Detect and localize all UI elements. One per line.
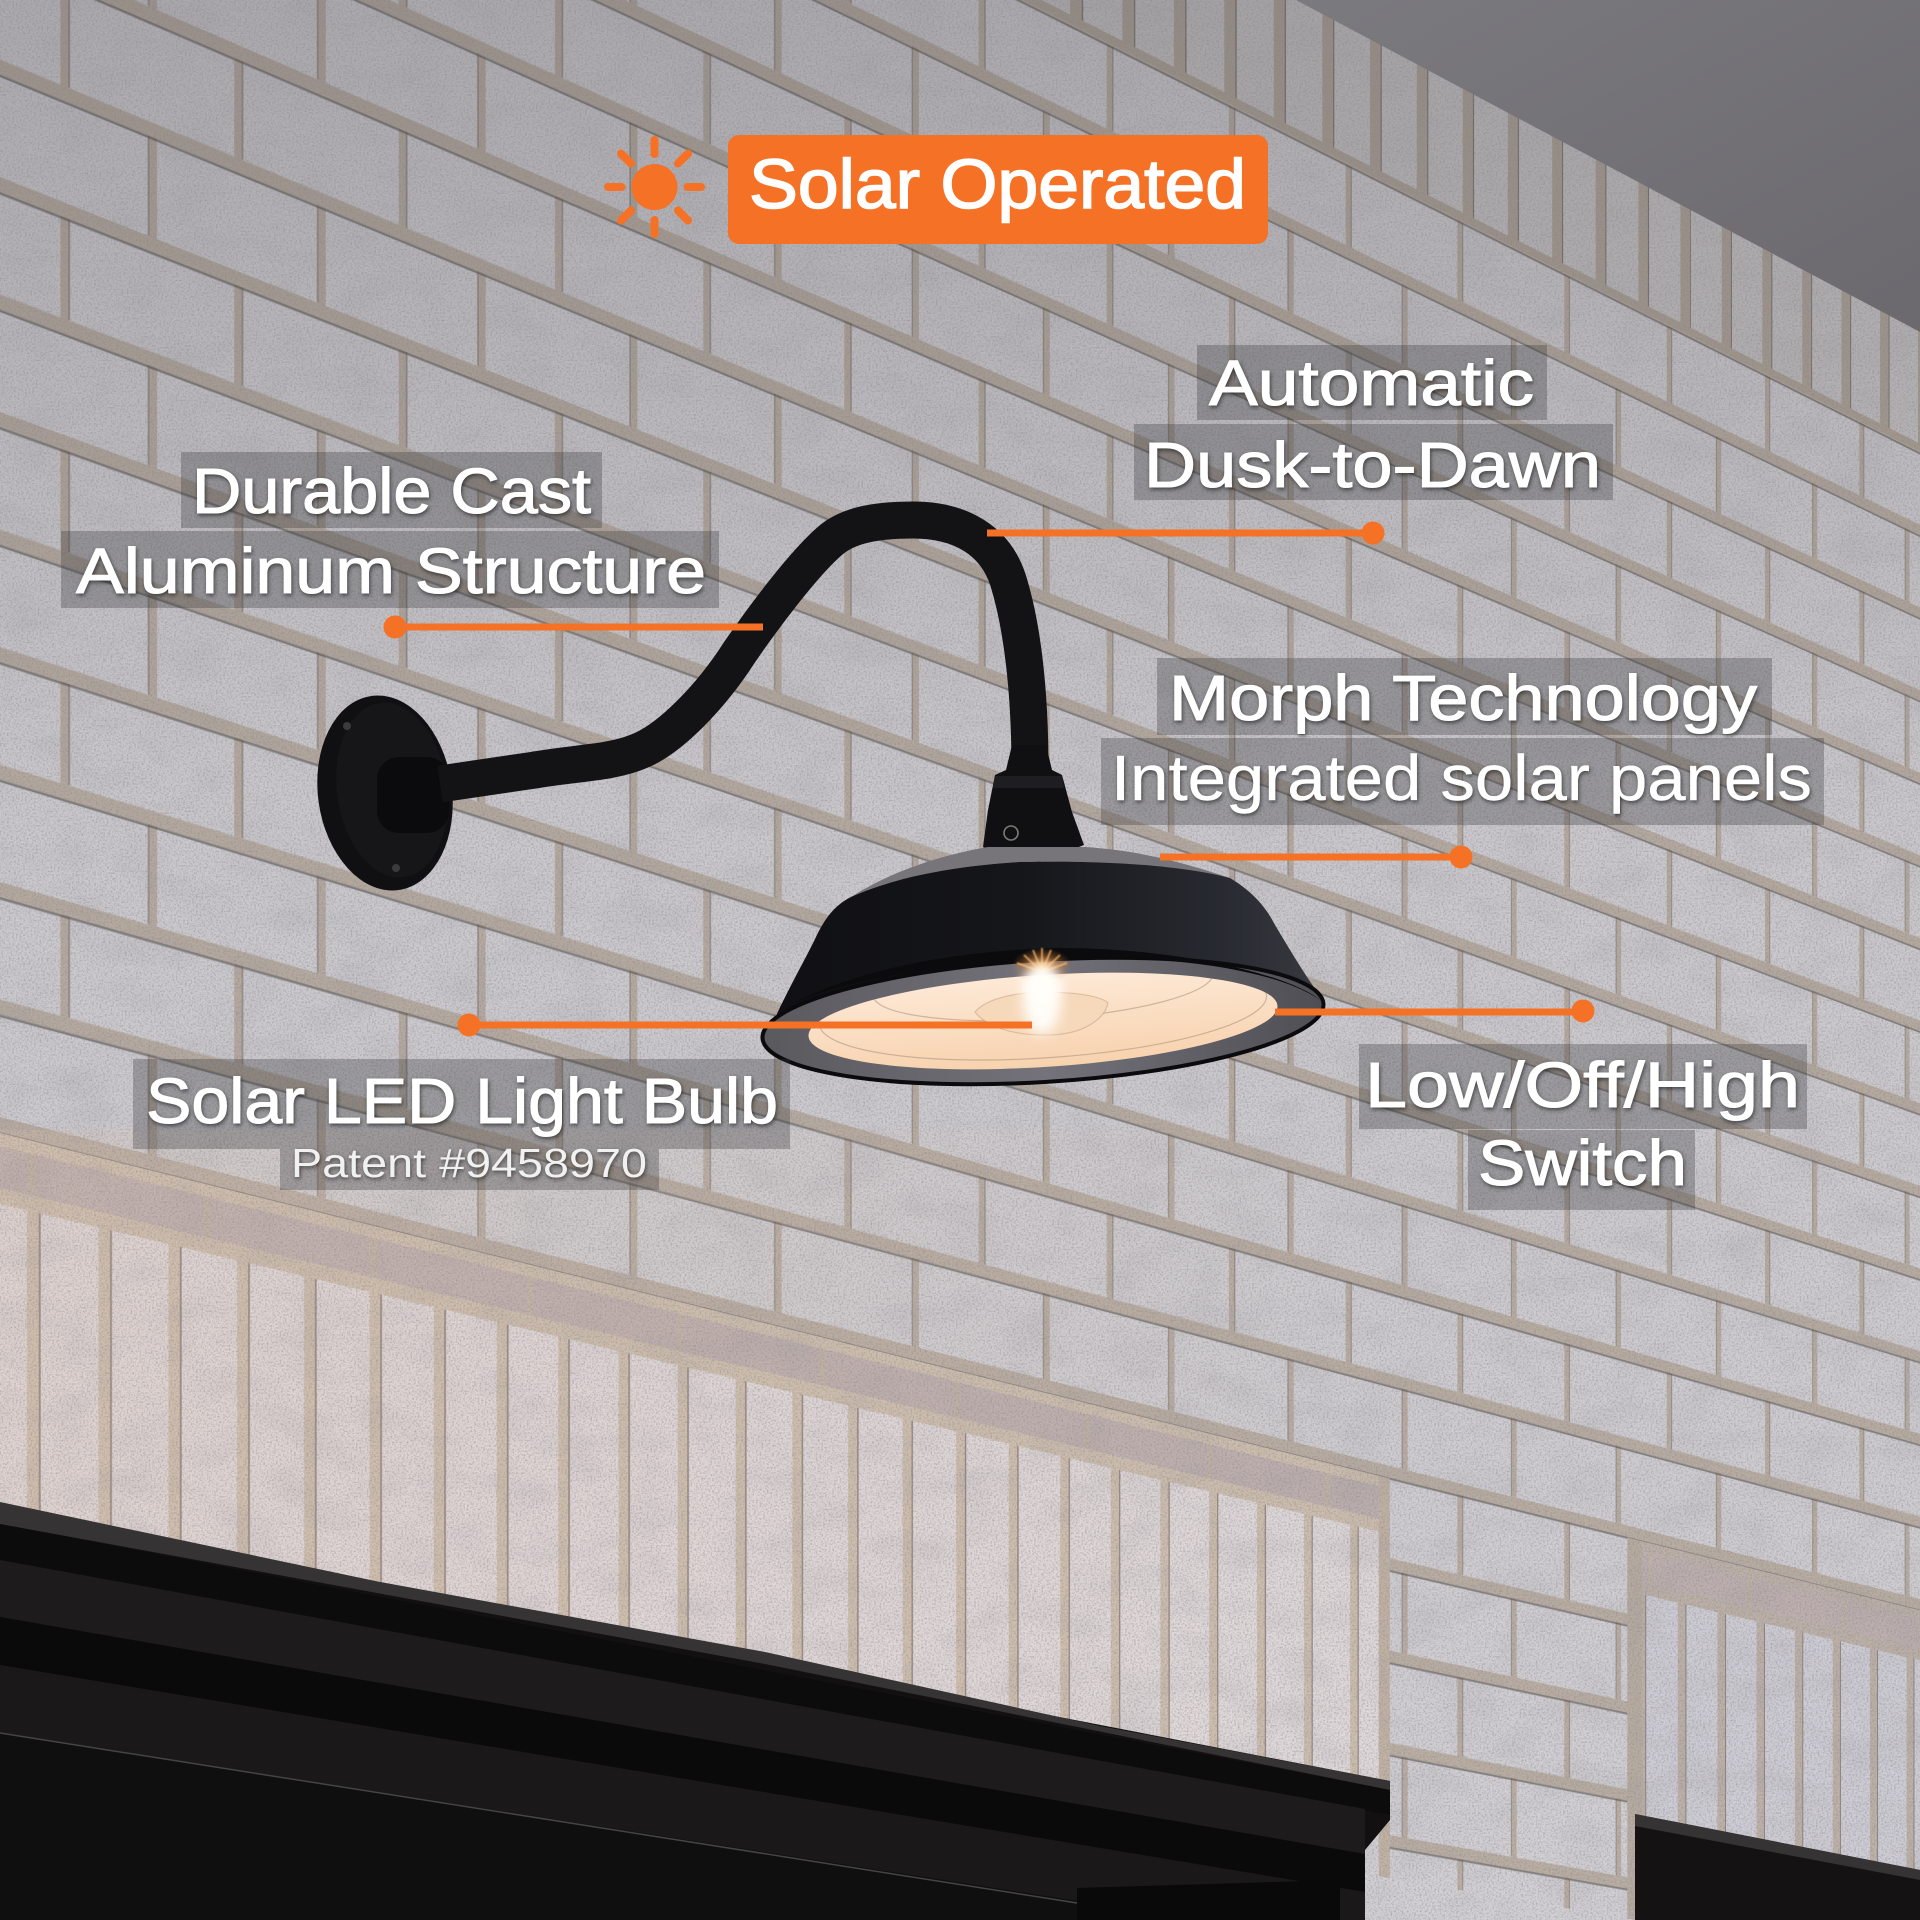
callout: Durable Cast Aluminum Structure: Durable Cast <box>192 455 591 527</box>
callout: Low/Off/High Switch: Switch <box>1478 1127 1687 1199</box>
callout: Solar LED Light Bulb Patent: Solar LED Light Bulb <box>146 1065 778 1137</box>
callout line: morph technology <box>1160 846 1472 868</box>
callout: Automatic Dusk-to-Dawn: Dusk-to-Dawn <box>1144 429 1601 501</box>
collar <box>983 745 1084 862</box>
bulb lens <box>975 992 1108 1035</box>
callout: Automatic Dusk-to-Dawn <box>1134 345 1613 501</box>
shade lower band over rim top <box>790 948 1320 1005</box>
callout line: LED bulb <box>458 1014 1032 1036</box>
wall mount plate <box>305 687 465 899</box>
shade rim <box>759 943 1327 1099</box>
shade body <box>770 862 1324 1060</box>
callout: Low/Off/High Switch <box>1359 1044 1807 1210</box>
bulb glow <box>1012 948 1072 1034</box>
gooseneck lamp <box>305 520 1327 1099</box>
badge: Solar Operated <box>728 135 1268 244</box>
dark door lintel right <box>1635 1814 1920 1920</box>
callout: Automatic Dusk-to-Dawn: Automatic <box>1209 347 1534 419</box>
callout: Low/Off/High Switch: Low/Off/High <box>1365 1049 1800 1121</box>
callout: Morph Technology Integrated solar panels: Morph Technology <box>1169 662 1757 734</box>
curved arm <box>440 520 1030 784</box>
callout: Morph Technology Integrated solar panels: Integrated solar panels <box>1111 742 1812 814</box>
callout: Solar LED Light Bulb Patent: Patent #9458970 <box>291 1140 647 1186</box>
brick pier lower courses <box>1378 1824 1635 1920</box>
callout line: switch <box>1275 1000 1594 1022</box>
callout: Morph Technology Integrated solar panels <box>1101 658 1824 825</box>
callout: Durable Cast Aluminum Structure <box>61 452 719 608</box>
icon: sun <box>608 140 701 234</box>
shade dome highlight <box>851 847 1230 897</box>
callout line: aluminum structure <box>384 616 763 638</box>
callout: Durable Cast Aluminum Structure: Aluminum Structure <box>76 535 706 607</box>
dark door lintel left <box>0 1502 1390 1920</box>
callout line: dusk-to-dawn <box>987 522 1384 544</box>
lit interior <box>808 972 1278 1070</box>
callout: Solar LED Light Bulb Patent <box>133 1059 790 1190</box>
badge: Solar Operated: Solar Operated <box>749 145 1246 223</box>
soffit ceiling <box>1296 0 1920 332</box>
